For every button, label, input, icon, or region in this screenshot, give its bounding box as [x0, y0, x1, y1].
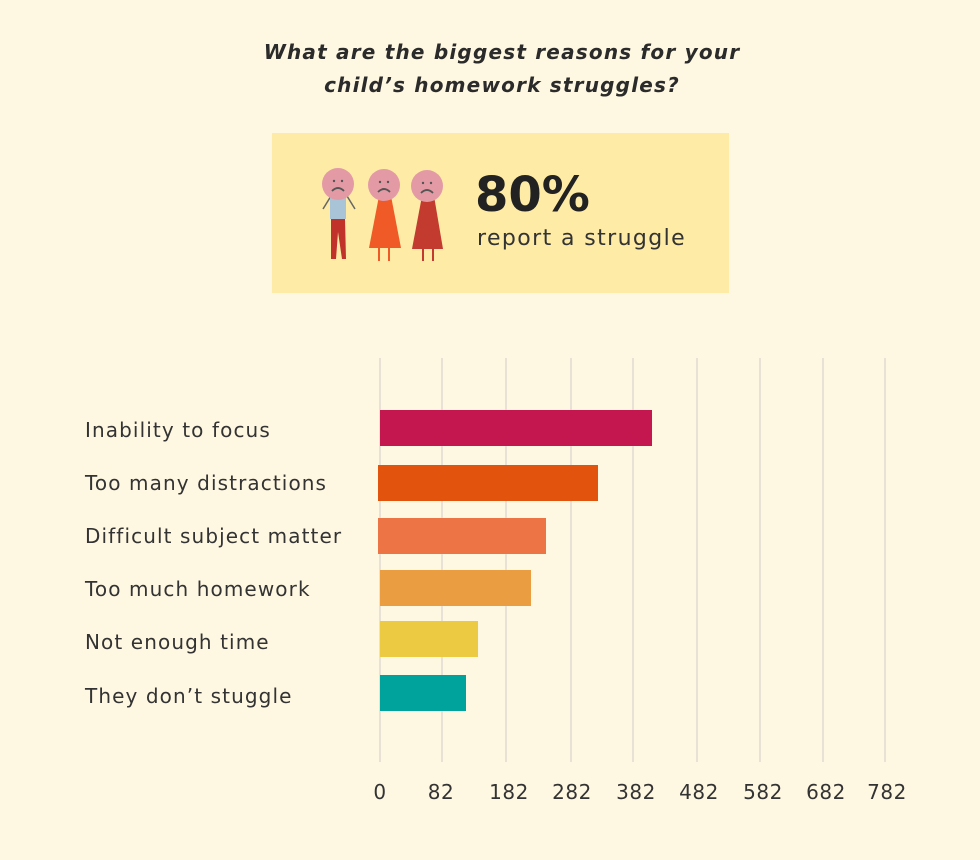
bar chart: 682	[806, 780, 846, 804]
bar chart: 782	[867, 780, 907, 804]
bar chart: 182	[489, 780, 529, 804]
title: child’s homework struggles?	[324, 73, 680, 97]
icon: three sad children	[322, 168, 443, 261]
bar: Inability to focus	[380, 410, 652, 446]
bar chart: Difficult subject matter	[85, 524, 342, 548]
bar: Difficult subject matter	[378, 518, 546, 554]
stat caption: report a struggle	[477, 226, 686, 251]
bar: They don't struggle	[380, 675, 466, 711]
x axis ticks: 0	[373, 780, 387, 804]
bar chart	[84, 358, 907, 804]
bar chart: Too much homework	[85, 577, 311, 601]
bar chart: Not enough time	[85, 630, 270, 654]
bar chart: 82	[428, 780, 454, 804]
bar: Not enough time	[380, 621, 478, 657]
bar chart: 282	[552, 780, 592, 804]
title: What are the biggest reasons for your	[264, 40, 740, 64]
bar: Too many distractions	[378, 465, 598, 501]
bar chart: 482	[679, 780, 719, 804]
title	[264, 40, 740, 97]
category labels: Inability to focus	[85, 418, 271, 442]
bar chart: Too many distractions	[85, 471, 327, 495]
stat number: 80%	[475, 167, 590, 223]
bar chart: They don’t stuggle	[85, 684, 293, 708]
bar: Too much homework	[380, 570, 531, 606]
bar chart: 582	[743, 780, 783, 804]
panel: stat callout	[272, 133, 729, 293]
bar chart: 382	[616, 780, 656, 804]
